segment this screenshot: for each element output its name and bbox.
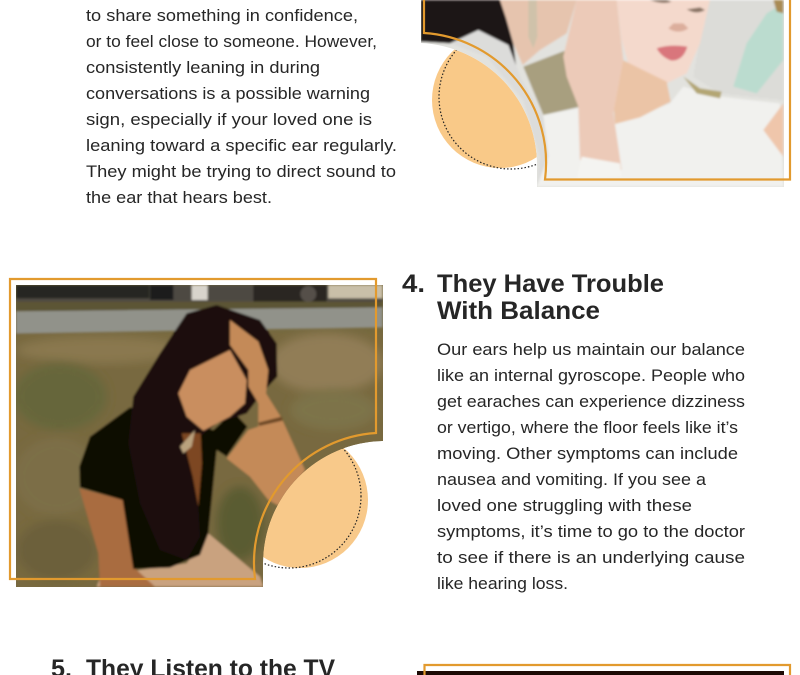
section 4 body text: moving. Other symptoms can include	[437, 444, 738, 463]
heading: section 4: They Have Trouble	[437, 270, 664, 298]
section 3 body text: leaning toward a specific ear regularly.	[86, 136, 397, 155]
dotted circle accent	[217, 424, 361, 568]
section 4 body text: nausea and vomiting. If you see a	[437, 470, 707, 489]
panel: woman holding head photo with accents	[10, 279, 383, 590]
peach circle accent	[232, 432, 368, 568]
section 4 body text: or vertigo, where the floor feels like it’s	[437, 418, 738, 437]
orange frame	[10, 279, 376, 579]
section 4 body text: like hearing loss.	[437, 574, 568, 593]
panel: section 5 photo top edge	[417, 665, 790, 675]
heading: section 4	[402, 270, 664, 325]
hair	[128, 305, 277, 560]
photo: dark TV scene	[417, 671, 784, 675]
section 3 body text: conversations is a possible warning	[86, 84, 370, 103]
shirt	[79, 407, 247, 569]
heading: section 4: With Balance	[437, 297, 600, 325]
face	[178, 350, 247, 431]
photo: two women whispering	[417, 0, 787, 190]
orange frame	[424, 665, 790, 675]
section 3 body text: to share something in confidence,	[86, 6, 358, 25]
section 3 body text: sign, especially if your loved one is	[86, 110, 372, 129]
section 4 body text: Our ears help us maintain our balance	[437, 340, 745, 359]
section 4 body text: to see if there is an underlying cause	[437, 548, 745, 567]
left arm	[79, 488, 155, 587]
section 3 body text: or to feel close to someone. However,	[86, 32, 377, 51]
section 4 body text: loved one struggling with these	[437, 496, 692, 515]
section 4 body text: like an internal gyroscope. People who	[437, 366, 745, 385]
panel: whispering photo with accents	[417, 0, 790, 190]
section 3 body text: They might be trying to direct sound to	[86, 162, 396, 181]
chest	[182, 433, 202, 507]
section 3 body text	[86, 6, 397, 207]
section 4 body text: symptoms, it’s time to go to the doctor	[437, 522, 745, 541]
section 4 body text: get earaches can experience dizziness	[437, 392, 745, 411]
dotted circle accent	[439, 25, 583, 169]
section 3 body text: the ear that hears best.	[86, 188, 272, 207]
photo: dizzy woman on grass	[13, 285, 383, 590]
skirt	[97, 533, 263, 587]
orange frame	[424, 0, 790, 180]
section 4 body text	[437, 340, 745, 593]
background	[85, 332, 382, 568]
peach circle accent	[432, 32, 568, 168]
section 3 body text: consistently leaning in during	[86, 58, 320, 77]
heading: section 4: 4.	[402, 270, 425, 298]
forearm and hand	[227, 320, 305, 508]
